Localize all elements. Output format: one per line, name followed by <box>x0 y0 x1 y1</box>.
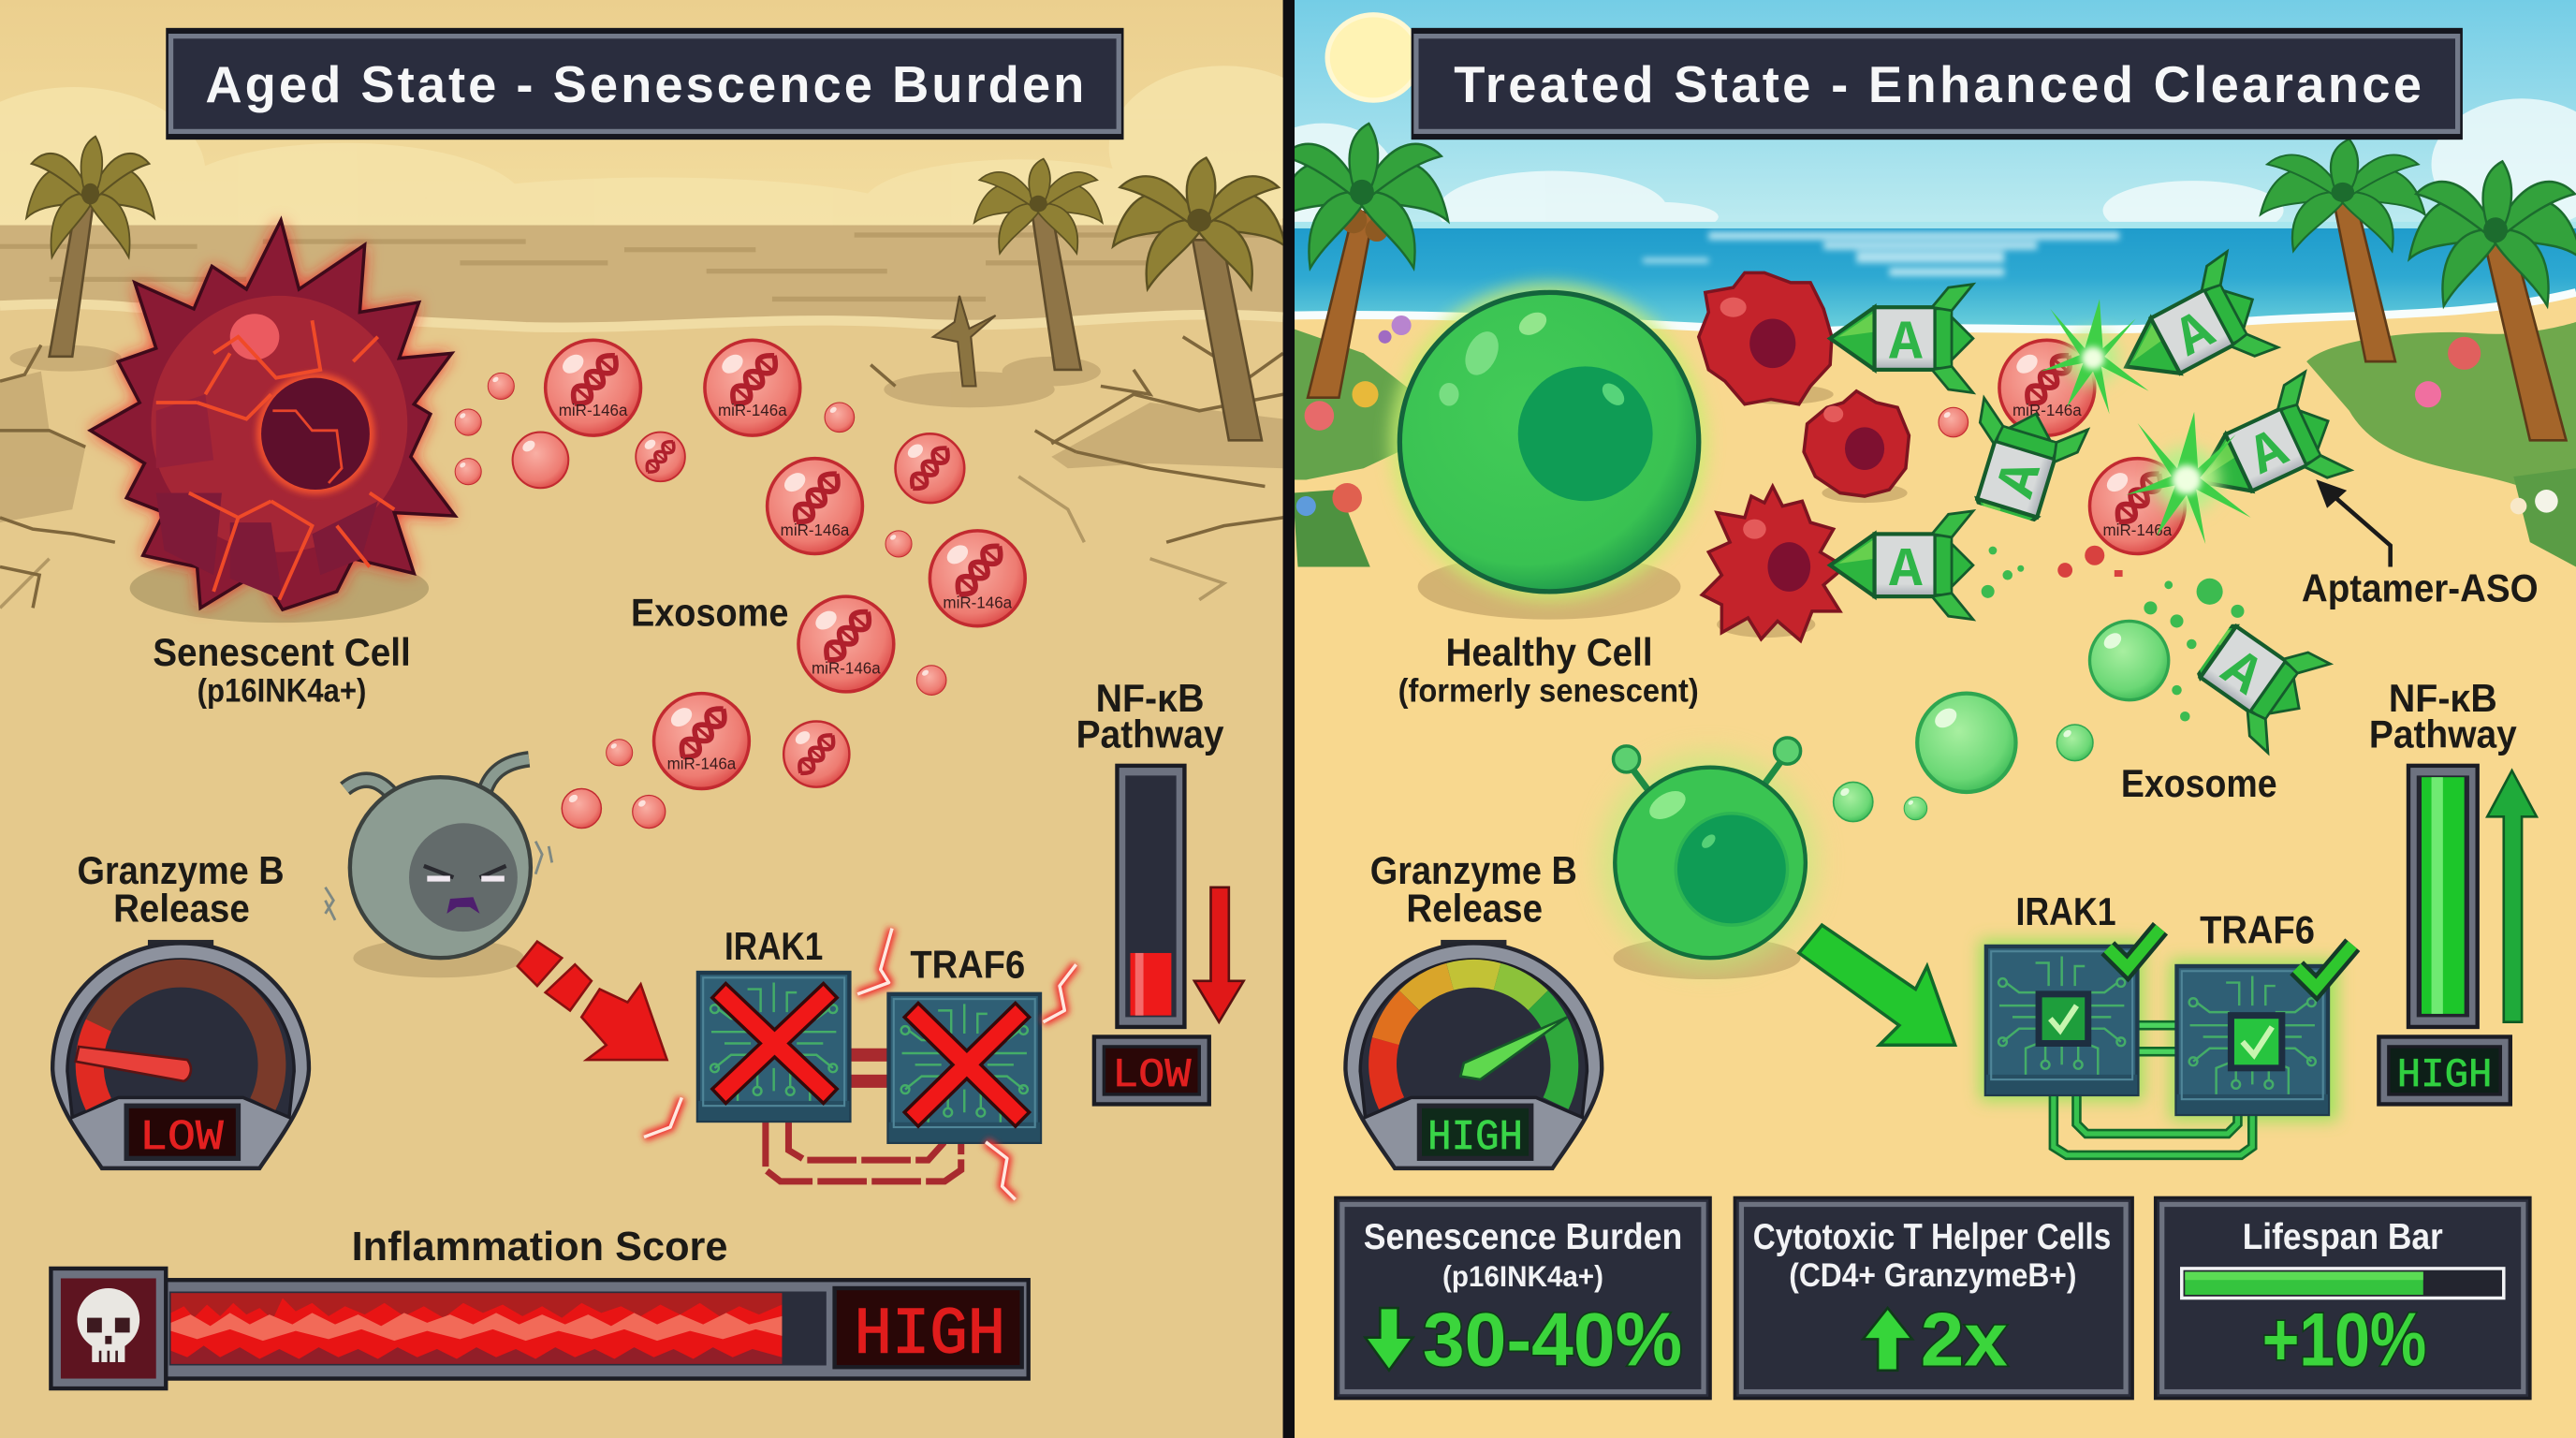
readout <box>126 1106 238 1158</box>
icon: healthy green cell <box>1390 283 1708 620</box>
label: IRAK1 treated: IRAK1 <box>2016 889 2116 933</box>
foam <box>1293 292 2576 332</box>
icon: aptamer rockets: A <box>1985 454 2056 505</box>
exosomes: being cleared <box>1939 340 2244 721</box>
icon: left green palm tree <box>1276 124 1448 398</box>
grass right <box>2306 322 2576 501</box>
gauge: granzyme low <box>52 940 309 1168</box>
label: healthy cell <box>1398 630 1699 709</box>
exosomes: being cleared: miR-146a <box>2012 401 2082 419</box>
chips: active IRAK1 and TRAF6 <box>1980 929 2352 1155</box>
dried sea <box>0 225 1283 326</box>
red debris <box>2057 546 2123 578</box>
exosomes: aged state stream: miR-146a <box>812 659 881 678</box>
panel: cytotoxic T helper cells: 2x <box>1921 1298 2008 1382</box>
panel: treated state background <box>1249 0 2576 1438</box>
grass left <box>1293 329 1416 479</box>
panel: lifespan bar <box>2156 1197 2530 1399</box>
icon: aptamer rockets: A <box>1889 312 1923 375</box>
title: treated state: Treated State - Enhanced Clearance <box>1454 56 2422 113</box>
needle <box>76 1047 191 1081</box>
arrow: NF-kB down <box>1194 888 1244 1022</box>
label: NF-kB aged <box>1076 676 1224 756</box>
readout <box>1419 1106 1531 1158</box>
icon: middle green palm tree <box>2261 139 2425 361</box>
panel: lifespan bar: +10% <box>2262 1298 2426 1382</box>
gauge: granzyme high: HIGH <box>1427 1113 1523 1162</box>
label: senescent cell: Senescent Cell <box>153 630 411 674</box>
clouds <box>1295 98 2576 222</box>
exosomes: green released <box>1834 621 2169 822</box>
exosomes: being cleared: miR-146a <box>2103 521 2172 539</box>
flowers <box>1296 315 2558 516</box>
label: inflammation score: Inflammation Score <box>352 1224 728 1269</box>
icon: aptamer rockets: A <box>1889 538 1923 602</box>
panel: lifespan bar: Lifespan Bar <box>2243 1217 2443 1257</box>
nucleus <box>256 373 374 494</box>
meter: inflammation score <box>51 1269 1029 1388</box>
panel: cytotoxic T helper cells <box>1734 1197 2132 1399</box>
meter: inflammation score: HIGH <box>855 1299 1005 1372</box>
panel: senescence burden: Senescence Burden <box>1364 1217 1682 1257</box>
center chips <box>2036 990 2091 1047</box>
readout: high <box>835 1288 1022 1367</box>
label: healthy cell: (formerly senescent) <box>1398 672 1699 709</box>
wires <box>2054 1025 2252 1155</box>
label: NF-kB aged: NF-κB <box>1096 676 1204 720</box>
divider <box>1283 0 1295 1438</box>
label: exosome treated: Exosome <box>2121 761 2277 805</box>
down arrow <box>1365 1308 1412 1371</box>
icon: aptamer rockets <box>1830 252 2351 753</box>
exosomes: aged state stream: miR-146a <box>667 754 737 772</box>
panel: senescence burden: 30-40% <box>1423 1298 1682 1382</box>
lightning sparks <box>644 929 1076 1199</box>
label: NF-kB treated: Pathway <box>2369 712 2517 756</box>
icon: skull <box>51 1269 166 1388</box>
icon: dead sapling <box>933 296 996 386</box>
label: aptamer-aso: Aptamer-ASO <box>2302 565 2539 609</box>
arrow: NF-kB up <box>2487 770 2537 1022</box>
check marks <box>2108 929 2352 988</box>
red x marks <box>726 997 1016 1112</box>
green debris <box>1982 547 2244 721</box>
exosomes: aged state stream: miR-146a <box>559 401 628 419</box>
label: NF-kB treated: NF-κB <box>2389 676 2497 720</box>
label: NF-kB treated <box>2369 676 2517 756</box>
icon: active green T cell <box>1600 738 1817 979</box>
title: aged state <box>166 28 1123 139</box>
readout: NF-kB high <box>2378 1036 2510 1104</box>
icon: aptamer rockets: A <box>2165 300 2225 372</box>
label: granzyme aged <box>77 848 285 931</box>
readout: NF-kB high: HIGH <box>2397 1052 2492 1099</box>
sea sparkle <box>1643 231 2119 276</box>
exosomes: aged state stream: miR-146a <box>781 521 850 539</box>
panel: cytotoxic T helper cells: Cytotoxic T Helper Cells <box>1753 1217 2111 1257</box>
chips: blocked IRAK1 and TRAF6 <box>644 929 1076 1199</box>
icon: exhausted grey T cell <box>326 759 552 977</box>
cracks <box>156 320 394 600</box>
label: exosome aged: Exosome <box>631 591 788 635</box>
readout: NF-kB low: LOW <box>1112 1052 1192 1099</box>
icon: left dry palm tree <box>26 137 154 357</box>
icon: right green palm tree <box>2409 161 2576 440</box>
icon: senescent cell <box>91 220 455 623</box>
label: granzyme aged: Granzyme B <box>77 848 285 892</box>
panel: cytotoxic T helper cells: (CD4+ GranzymeB+) <box>1789 1257 2076 1294</box>
label: senescent cell: (p16INK4a+) <box>198 672 366 709</box>
gauge: granzyme high <box>1345 940 1602 1168</box>
readout: NF-kB low <box>1094 1036 1209 1104</box>
sky <box>0 0 1283 227</box>
icon: right dry palm tree <box>1113 157 1285 440</box>
title: treated state <box>1412 28 2463 139</box>
icon: impact sparks <box>2041 299 2251 544</box>
icon: aptamer rockets: A <box>2209 638 2274 710</box>
label: IRAK1 aged: IRAK1 <box>724 924 823 968</box>
clouds <box>0 66 1283 225</box>
exosomes: aged state stream: miR-146a <box>718 401 787 419</box>
sky <box>1293 0 2576 227</box>
label: senescent cell <box>153 630 411 709</box>
arrow: aptamer-aso pointer <box>2320 483 2391 567</box>
label: granzyme treated: Release <box>1406 887 1543 931</box>
gauge: granzyme low: LOW <box>139 1113 224 1162</box>
bar: NF-kB high <box>2408 766 2478 1027</box>
arrow: dashed red <box>518 942 667 1060</box>
progress bar <box>2182 1269 2504 1299</box>
needle <box>1460 1017 1567 1079</box>
wires <box>766 1051 961 1181</box>
arrow: big green <box>1799 925 1955 1045</box>
exosomes: aged state stream: miR-146a <box>943 593 1012 611</box>
icon: middle dry palm tree <box>974 159 1103 370</box>
label: granzyme treated: Granzyme B <box>1370 848 1577 892</box>
up arrow <box>1863 1308 1912 1371</box>
panel: senescence burden <box>1336 1197 1710 1399</box>
label: TRAF6 aged: TRAF6 <box>910 942 1025 986</box>
label: NF-kB aged: Pathway <box>1076 712 1224 756</box>
cracked ground <box>0 345 1283 522</box>
label: granzyme aged: Release <box>113 887 250 931</box>
bar: NF-kB low <box>1117 766 1184 1027</box>
exosomes: aged state stream <box>455 340 1025 829</box>
title: aged state: Aged State - Senescence Burden <box>205 56 1084 113</box>
waveform <box>171 1293 782 1364</box>
panel: aged state background <box>0 0 1339 1438</box>
panel: senescence burden: (p16INK4a+) <box>1442 1259 1603 1293</box>
plates <box>156 394 378 600</box>
label: granzyme treated <box>1370 848 1577 931</box>
icon: sun <box>1327 15 1419 100</box>
icon: damaged senescent cells <box>1699 272 1909 640</box>
label: healthy cell: Healthy Cell <box>1445 630 1653 674</box>
sea <box>1295 228 2576 327</box>
label: TRAF6 treated: TRAF6 <box>2200 907 2315 951</box>
icon: aptamer rockets: A <box>2240 418 2298 490</box>
